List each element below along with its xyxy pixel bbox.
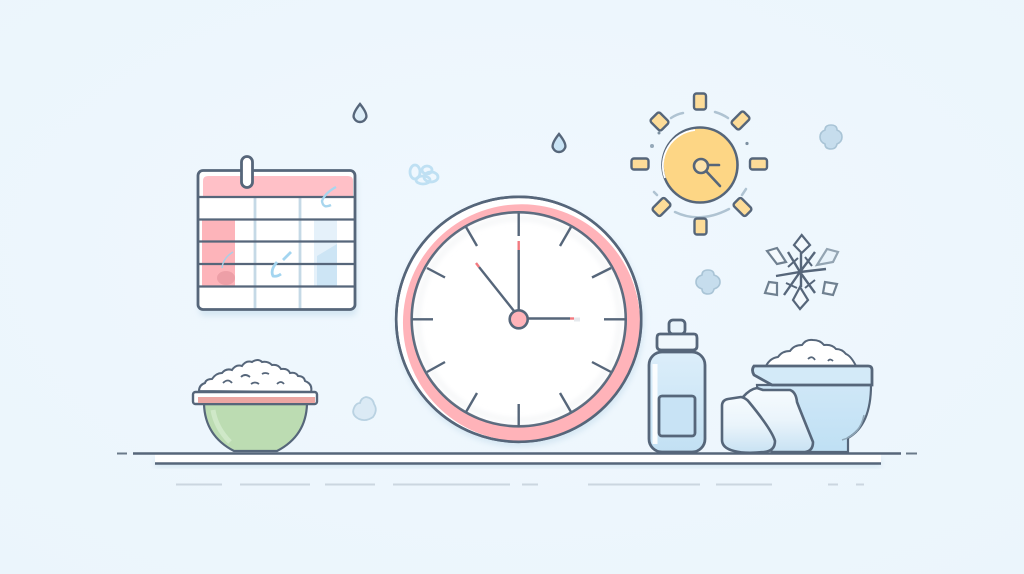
clock ticks [412,213,626,427]
icon: calendar [198,156,357,316]
icon: cloud puff lower left [353,397,376,420]
icon: back food pouch [743,388,813,452]
icon: snowflake [765,235,838,309]
sun rays [632,94,767,234]
icon: water drop left [354,104,366,122]
icon: clover puff middle [696,270,720,294]
icon: bottle [649,320,705,452]
shelf [117,454,917,484]
clock hands [476,241,580,320]
icon: pale blue splash [410,165,438,184]
icon: sun clock [632,94,767,234]
icon: clover puff right [820,125,842,149]
icon: blue bowl of rice [752,340,872,452]
clock centre [510,310,528,328]
icon: wall clock [396,197,644,447]
icon: front food pouch [722,397,775,453]
icon: green rice bowl [193,360,317,451]
icon: water drop right [553,134,565,152]
